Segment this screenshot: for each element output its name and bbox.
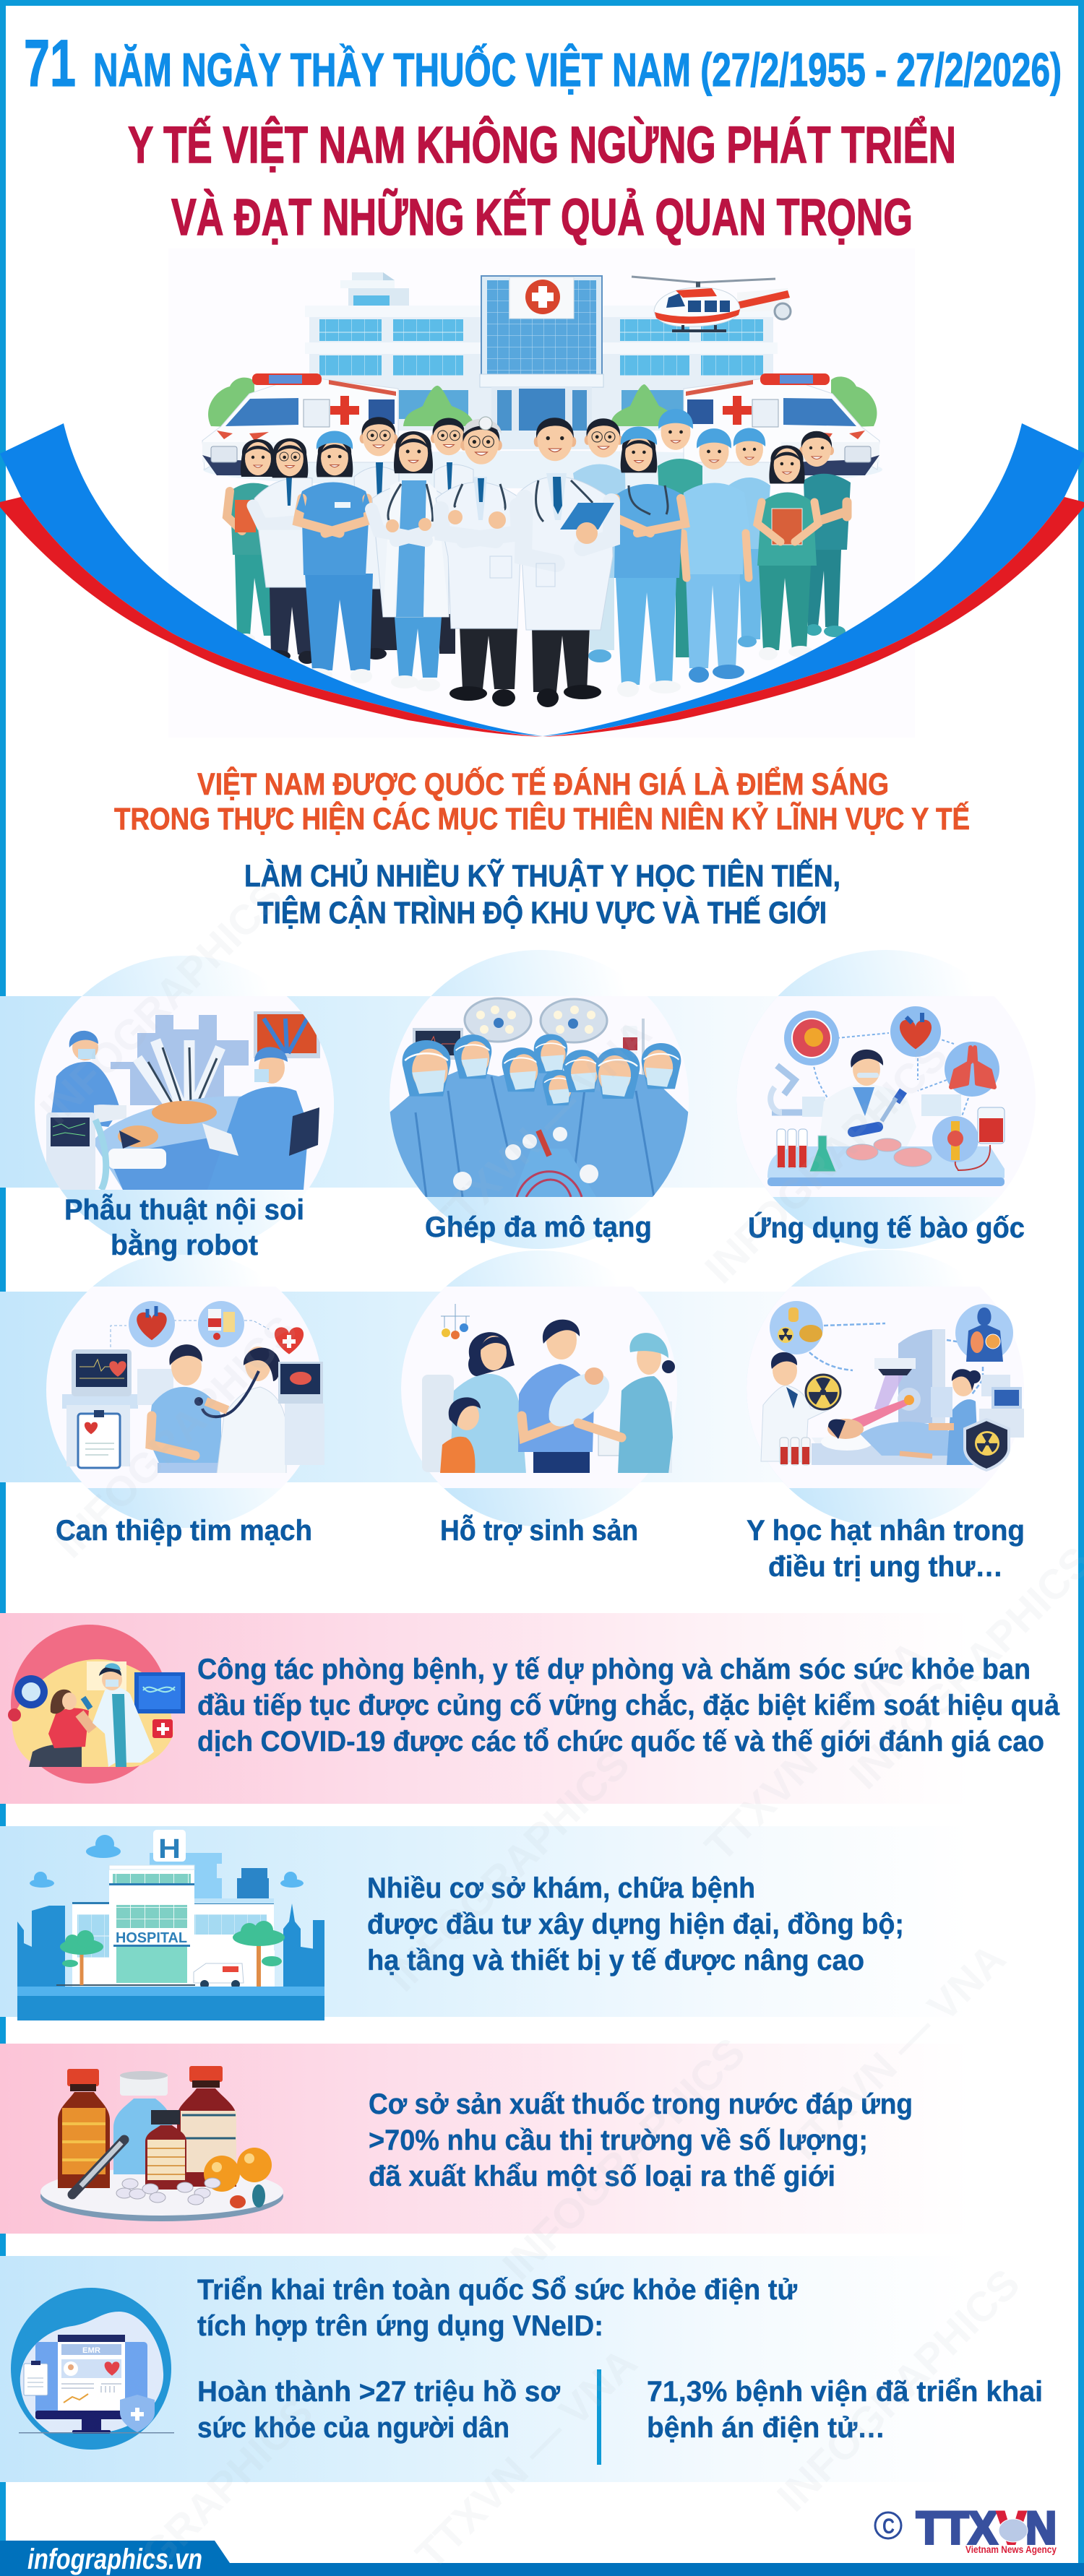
blue subheading: [244, 858, 840, 930]
illustration: doctor examining patient: [62, 1301, 324, 1474]
stat: records completed: [197, 2376, 561, 2444]
watermarks: INFOGRAPHICS: [696, 1032, 957, 1292]
hospital building: [305, 272, 778, 449]
panel: assisted reproduction: [401, 1250, 677, 1547]
icon: EMR monitor: [11, 2288, 174, 2450]
label: Can thiệp tim mạch: [56, 1515, 312, 1547]
illustration: radiotherapy: [761, 1301, 1024, 1470]
EMR header text: EMR: [82, 2346, 100, 2355]
staff: back row: [227, 409, 851, 662]
stat: records completed: sức khỏe của người dân: [197, 2412, 509, 2444]
text: >70% nhu cầu thị trường về số lượng;: [369, 2125, 868, 2156]
text: [369, 2088, 913, 2192]
copyright logo: C: [882, 2515, 895, 2538]
watermarks: [31, 873, 1084, 2576]
blue subheading: LÀM CHỦ NHIỀU KỸ THUẬT Y HỌC TIÊN TIẾN,: [244, 858, 840, 894]
text: [367, 1872, 904, 1976]
watermarks: INFOGRAPHICS: [494, 2029, 754, 2289]
watermarks: TTXVN — VNA: [421, 1010, 661, 1249]
text: intro: Triển khai trên toàn quốc Sổ sức khỏe điện tử: [197, 2274, 797, 2306]
icon: hospital cityscape: [17, 1830, 324, 2020]
panel: multi-organ transplant: [390, 950, 689, 1249]
stat: hospitals with e-records: [647, 2376, 1043, 2444]
copyright logo: Vietnam News Agency: [965, 2543, 1057, 2555]
stat: hospitals with e-records: 71,3% bệnh viện đã triển khai: [647, 2376, 1043, 2408]
helicopter: [632, 277, 791, 331]
text: được đầu tư xây dựng hiện đại, đồng bộ;: [367, 1909, 904, 1940]
ambulance left: [202, 373, 398, 475]
stat: records completed: Hoàn thành >27 triệu hồ sơ: [197, 2376, 561, 2408]
label: Y học hạt nhân trong: [747, 1515, 1025, 1547]
watermarks: TTXVN — VNA: [407, 2339, 646, 2576]
text: [197, 1654, 1060, 1758]
stat: hospitals with e-records: bệnh án điện tử…: [647, 2412, 885, 2444]
icon: medicine bottles: [40, 2066, 283, 2221]
text: hạ tầng và thiết bị y tế được nâng cao: [367, 1945, 864, 1976]
illustration: family with newborn: [422, 1304, 675, 1474]
blue subheading: TIỆM CẬN TRÌNH ĐỘ KHU VỰC VÀ THẾ GIỚI: [257, 895, 827, 930]
orange subheading: VIỆT NAM ĐƯỢC QUỐC TẾ ĐÁNH GIÁ LÀ ĐIỂM SÁNG: [197, 766, 889, 802]
hero illustration: medical team in front of hospital: [168, 248, 915, 738]
senior doctor: [436, 417, 520, 706]
footer site name: infographics.vn: [27, 2543, 202, 2575]
text: Cơ sở sản xuất thuốc trong nước đáp ứng: [369, 2088, 913, 2120]
watermarks: INFOGRAPHICS: [46, 1307, 306, 1567]
label: Phẫu thuật nội soi: [64, 1193, 304, 1226]
text: đã xuất khẩu một số loại ra thế giới: [369, 2161, 835, 2192]
panel: prevention: [0, 1613, 1078, 1804]
watermarks: TTXVN — VNA: [696, 1631, 935, 1870]
panel: stem cells: [736, 950, 1036, 1249]
label: Ứng dụng tế bào gốc: [748, 1211, 1025, 1244]
watermarks: INFOGRAPHICS: [378, 1740, 639, 2000]
label: [64, 1193, 304, 1261]
label: điều trị ung thư…: [768, 1551, 1003, 1583]
watermarks: INFOGRAPHICS: [31, 873, 292, 1133]
ribbons: red and blue swoosh: [0, 423, 1084, 737]
hospital H sign: H: [158, 1834, 181, 1864]
label: [747, 1515, 1025, 1583]
watermarks: TTXVN — VNA: [775, 1935, 1015, 2174]
band: second row of techniques: [0, 1292, 1078, 1482]
label: bằng robot: [111, 1228, 258, 1261]
illustration: surgical team: [390, 998, 689, 1197]
watermarks: GRAPHICS: [132, 2389, 322, 2576]
ambulance right: [684, 373, 879, 475]
panel: nuclear medicine: [747, 1250, 1025, 1583]
text: Nhiều cơ sở khám, chữa bệnh: [367, 1872, 755, 1904]
label: Hỗ trợ sinh sản: [440, 1513, 638, 1547]
title line: 71 years: [24, 27, 1062, 100]
lead doctor with clipboard: [520, 418, 614, 707]
label: Ghép đa mô tạng: [425, 1211, 652, 1243]
illustration: robot surgery: [46, 1011, 320, 1192]
panel: cardiac intervention: [46, 1252, 324, 1547]
text: intro: [197, 2274, 797, 2342]
main heading: [128, 116, 956, 246]
text: intro: tích hợp trên ứng dụng VNeID:: [197, 2310, 603, 2342]
text: dịch COVID-19 được các tổ chức quốc tế và thế giới đánh giá cao: [197, 1726, 1044, 1758]
staff: front row right: [613, 426, 818, 697]
band: first row of techniques: [0, 996, 1078, 1188]
copyright logo: TTXVN: [916, 2503, 1057, 2554]
panel: hospitals: [0, 1826, 1078, 2020]
hospital sign text: HOSPITAL: [116, 1930, 187, 1946]
text: đầu tiếp tục được củng cố vững chắc, đặc biệt kiểm soát hiệu quả: [197, 1688, 1060, 1721]
panel: pharmaceuticals: [0, 2044, 1078, 2234]
panel: robotic surgery: [35, 956, 334, 1261]
trees: [208, 376, 877, 428]
icon: vaccination: [8, 1625, 185, 1784]
watermarks: INFOGRAPHICS: [768, 2260, 1029, 2520]
footer bar: [0, 2541, 1084, 2576]
text: Công tác phòng bệnh, y tế dự phòng và chăm sóc sức khỏe ban: [197, 1654, 1031, 1685]
orange subheading: [114, 766, 970, 837]
title line: 71 years: 71: [24, 27, 76, 100]
panel: electronic health records: [0, 2256, 1078, 2482]
illustration: scientist and organs: [767, 1006, 1005, 1186]
staff: front row left: [253, 431, 449, 691]
